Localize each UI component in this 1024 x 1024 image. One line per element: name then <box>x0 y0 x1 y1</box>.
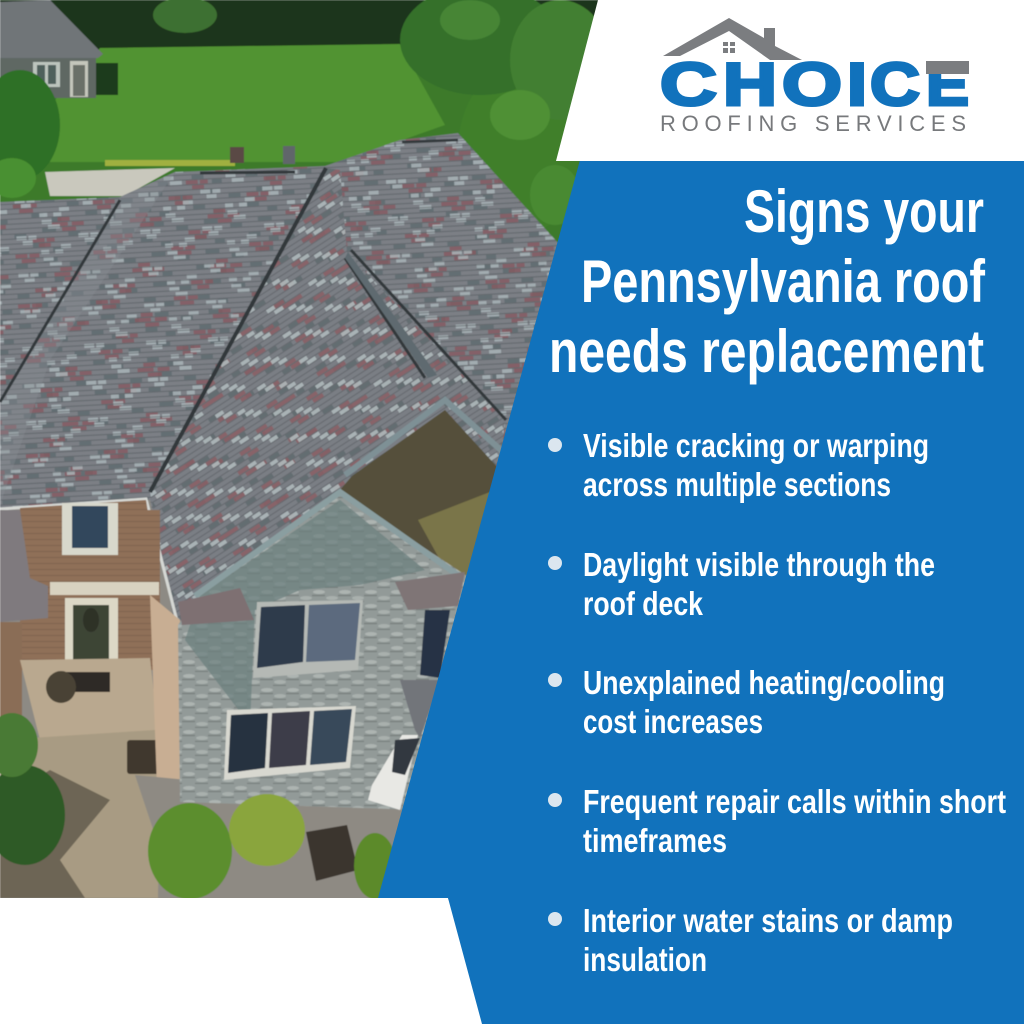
hip slope between left roofs <box>0 172 175 505</box>
logo wordmark CHOICE: C <box>660 51 717 118</box>
white bottom-left panel <box>0 898 482 1024</box>
trees on right <box>400 0 610 235</box>
item 1: across multiple sections <box>583 466 891 503</box>
left tree and shrub <box>0 713 65 865</box>
light shrub <box>229 794 305 866</box>
item 5: insulation <box>583 941 707 978</box>
item 4 <box>548 783 1006 859</box>
lawn <box>50 44 445 162</box>
item 1 <box>548 427 929 503</box>
driveway strip behind roof <box>45 168 175 196</box>
brown lower siding and porch <box>20 500 160 670</box>
fire pit <box>306 825 358 881</box>
item 4: timeframes <box>583 822 727 859</box>
photo: aerial view of house with new roof <box>0 0 620 900</box>
central roof slope <box>150 168 505 620</box>
lighter tree in tree line <box>153 0 217 33</box>
porch side wall <box>0 622 22 722</box>
porch roof <box>0 510 48 622</box>
logo wordmark CHOICE: O <box>782 51 842 118</box>
right shrub <box>354 833 396 899</box>
item 5: Interior water stains or damp <box>583 902 953 939</box>
upper stone window <box>253 600 363 678</box>
logo tagline: ROOFING SERVICES <box>660 111 966 136</box>
tree on left <box>0 70 60 198</box>
dormer ridge cap <box>345 252 437 378</box>
item 2: roof deck <box>583 585 704 622</box>
dark tree line behind lawn <box>0 0 620 50</box>
checklist <box>548 427 1006 978</box>
neighbouring house <box>0 0 118 98</box>
hedge row and chimneys <box>105 146 295 166</box>
logo wordmark CHOICE: H <box>723 51 777 118</box>
roof ridges <box>0 140 506 492</box>
patio chair <box>127 740 159 774</box>
item 2: Daylight visible through the <box>583 546 935 583</box>
main roof <box>0 132 558 510</box>
logo <box>660 18 969 136</box>
logo roof icon <box>663 18 802 60</box>
round shrub <box>148 803 232 899</box>
porch planter <box>46 671 76 703</box>
beige wall column <box>150 595 188 815</box>
item 3 <box>548 664 945 740</box>
item 5 <box>548 902 953 978</box>
small roof sections <box>178 588 254 625</box>
white logo panel <box>556 0 1024 161</box>
side window and portico <box>368 610 450 810</box>
front door <box>65 598 118 663</box>
item 2 <box>548 546 935 622</box>
item 3: cost increases <box>583 703 763 740</box>
gravel bed <box>135 775 400 898</box>
gable trim <box>195 492 462 596</box>
logo wordmark CHOICE: I <box>847 51 867 118</box>
stone wall <box>178 492 480 810</box>
logo wordmark CHOICE: C <box>870 51 920 118</box>
upper window <box>62 503 118 555</box>
left gutter <box>0 499 178 625</box>
olive siding gable <box>340 400 503 580</box>
logo grey bar on E <box>926 61 969 74</box>
porch floor <box>20 658 158 740</box>
shaded stone gable <box>185 500 425 725</box>
logo wordmark CHOICE: E <box>926 51 969 118</box>
item 3: Unexplained heating/cooling <box>583 664 945 701</box>
title <box>549 178 986 385</box>
logo wordmark CHOICE <box>660 51 969 118</box>
walkway <box>0 730 160 898</box>
blue content panel <box>378 160 1024 1024</box>
lower stone window <box>224 706 356 780</box>
item 1: Visible cracking or warping <box>583 427 929 464</box>
